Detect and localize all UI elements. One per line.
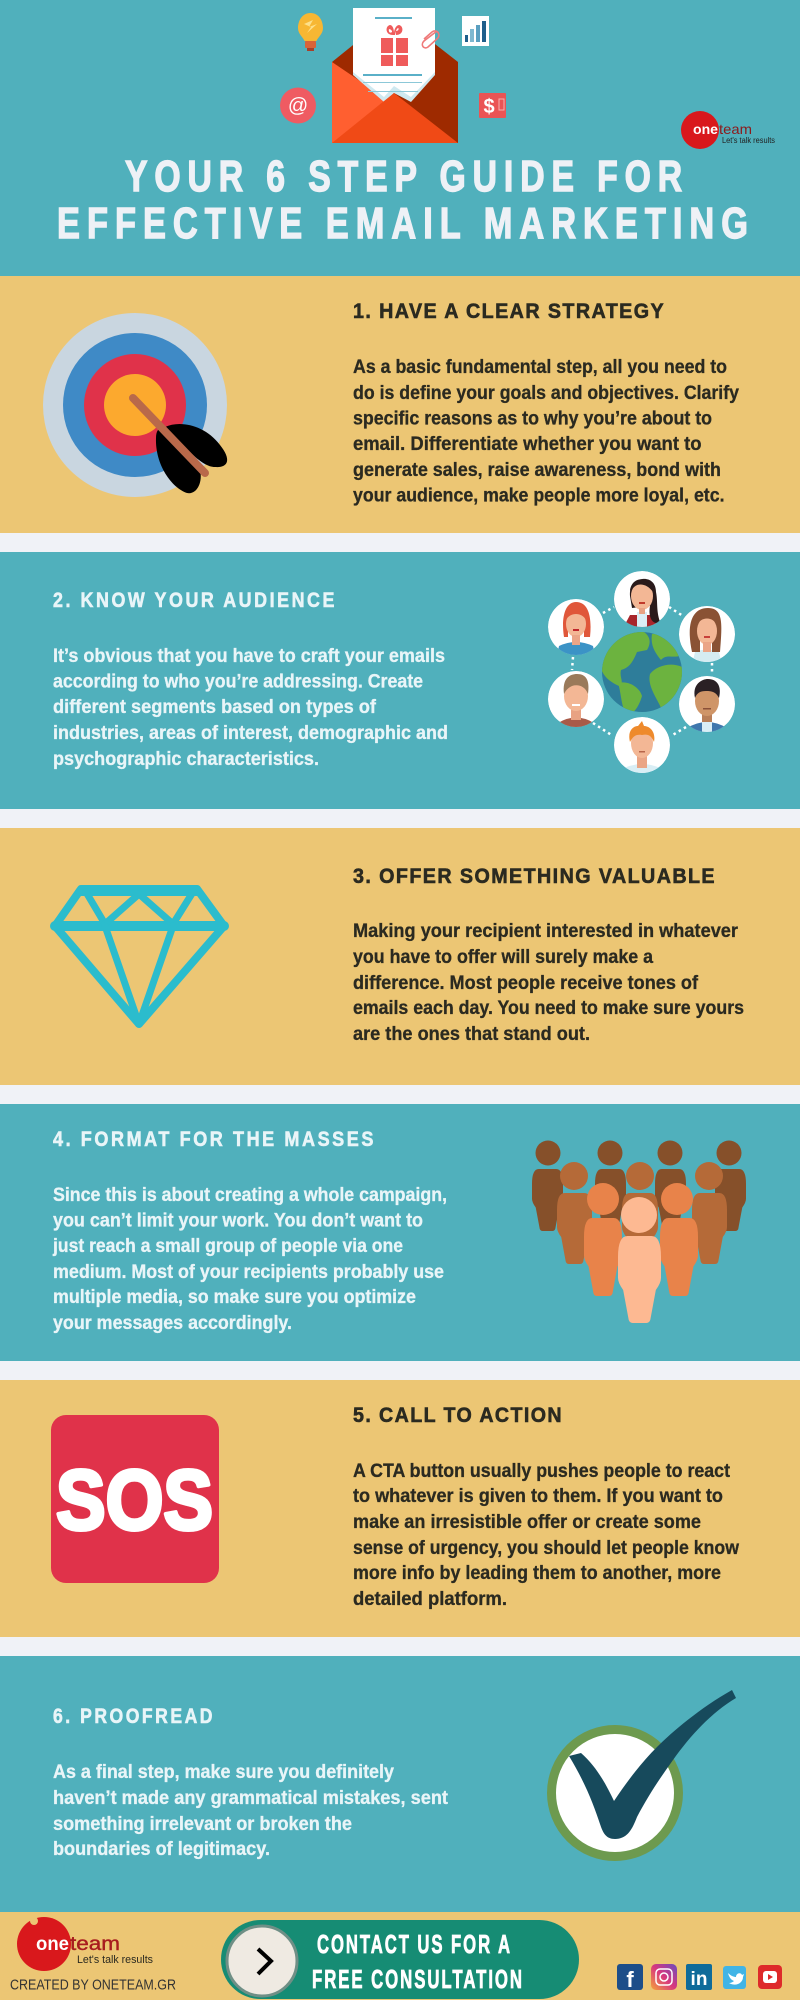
icon: dollar tile: $ [483, 96, 495, 118]
icon: woman dark hair [614, 571, 670, 630]
text: step 5 body: make an irresistible offer or create some [353, 1512, 701, 1533]
icon: gift [381, 25, 408, 66]
text: step 1 body: email. Differentiate whether you want to [353, 434, 702, 455]
icon: facebook: f [626, 1967, 634, 1992]
panel: footer [0, 1912, 800, 2000]
icon: youtube [758, 1965, 782, 1989]
text: step 6 body: something irrelevant or broken the [53, 1814, 352, 1835]
text: step 4 body: you can’t limit your work. You don’t want to [53, 1210, 423, 1232]
text: step 4 body: just reach a small group of people via one [52, 1236, 403, 1257]
text: step 4 body [52, 1185, 447, 1334]
icon: woman brown hair [679, 606, 735, 665]
icon: at sign [280, 88, 316, 124]
heading: step 4: 4. FORMAT FOR THE MASSES [53, 1128, 376, 1151]
text: step 1 body: do is define your goals and objectives. Clarify [353, 383, 739, 404]
heading: step 2: 2. KNOW YOUR AUDIENCE [53, 589, 337, 612]
text: step 1 body: your audience, make people more loyal, etc. [353, 486, 724, 506]
heading: step 1: 1. HAVE A CLEAR STRATEGY [353, 300, 665, 323]
text: step 4 body: medium. Most of your recipients probably use [53, 1262, 444, 1283]
icon: at sign: @ [288, 95, 308, 117]
text: step 6 body [53, 1762, 449, 1860]
text: step 2 body: industries, areas of interest, demographic and [53, 723, 448, 744]
text: step 4 body: your messages accordingly. [53, 1313, 292, 1334]
text: step 2 body: psychographic characteristics. [53, 749, 319, 770]
text: step 2 body [53, 646, 448, 770]
text: step 5 body: to whatever is given to them. If you want to [353, 1486, 723, 1507]
text: step 4 body: Since this is about creating a whole campaign, [53, 1185, 447, 1206]
logo: oneteam footer [17, 1917, 153, 1971]
logo: oneteam footer: Let's talk results [77, 1954, 153, 1966]
text: step 3 body: you have to offer will surely make a [353, 947, 653, 968]
panel: step 1 [0, 276, 800, 533]
text: step 3 body: are the ones that stand out. [353, 1024, 590, 1045]
icon: SOS badge [51, 1415, 219, 1583]
icon: woman red hair [548, 599, 604, 660]
logo: oneteam header: one [693, 121, 718, 137]
logo: oneteam footer: team [70, 1934, 120, 1955]
text: step 1 body: specific reasons as to why you’re about to [353, 408, 712, 430]
text: step 4 body: multiple media, so make sure you optimize [53, 1287, 416, 1308]
icon: people around the globe [548, 571, 735, 780]
icon: target with arrow [43, 313, 227, 497]
icon: globe [600, 630, 684, 714]
panel: step 5 [0, 1380, 800, 1637]
icon: chevron button [227, 1926, 297, 1996]
title [57, 152, 755, 248]
text: step 1 body [353, 357, 739, 506]
text: step 5 body: more info by leading them to another, more [353, 1563, 721, 1584]
icon: instagram [651, 1964, 677, 1990]
icon: man orange hair [614, 717, 670, 773]
logo: oneteam footer: one [36, 1934, 69, 1955]
icon: dollar tile [479, 93, 506, 118]
panel: step 4 [0, 1104, 800, 1361]
text: credit: CREATED BY ONETEAM.GR [10, 1976, 176, 1994]
text: step 6 body: haven’t made any grammatical mistakes, sent [53, 1788, 449, 1809]
icon: check mark in circle [552, 1690, 736, 1856]
icon: man dark hair [679, 676, 735, 732]
text: step 1 body: As a basic fundamental step, all you need to [353, 357, 727, 378]
text: step 5 body: A CTA button usually pushes people to react [353, 1461, 731, 1482]
icon: crowd of people [532, 1140, 746, 1323]
text: step 3 body: emails each day. You need to make sure yours [353, 998, 744, 1019]
panel: step 2 [0, 552, 800, 809]
heading: step 6: 6. PROOFREAD [53, 1705, 215, 1728]
panel: header [0, 0, 800, 276]
logo: oneteam header: team [719, 121, 752, 137]
icon: bar chart tile [462, 16, 489, 46]
text: step 3 body [353, 921, 744, 1045]
text: step 6 body: boundaries of legitimacy. [53, 1839, 270, 1860]
text: step 2 body: according to who you’re addressing. Create [53, 672, 423, 692]
text: button label: FREE CONSULTATION [312, 1964, 524, 1994]
text: step 2 body: It’s obvious that you have to craft your emails [53, 646, 445, 667]
text: step 5 body: detailed platform. [353, 1589, 507, 1610]
logo: oneteam header: Let's talk results [722, 136, 775, 145]
icon: paperclip [422, 31, 439, 48]
icon: facebook [617, 1964, 643, 1992]
icon: light bulb [298, 13, 323, 51]
icon: envelope with letter [332, 8, 458, 143]
logo: oneteam header [681, 111, 775, 149]
heading: step 5: 5. CALL TO ACTION [353, 1404, 563, 1427]
text: step 5 body [353, 1461, 739, 1610]
text: step 5 body: sense of urgency, you should let people know [353, 1538, 739, 1559]
icon: diamond [55, 889, 224, 1024]
panel: step 6 [0, 1656, 800, 1912]
heading: step 3: 3. OFFER SOMETHING VALUABLE [353, 865, 716, 888]
text: step 3 body: difference. Most people receive tones of [353, 973, 699, 994]
text: step 2 body: different segments based on types of [53, 697, 377, 718]
icon: man light brown hair [548, 671, 604, 727]
text: step 3 body: Making your recipient interested in whatever [353, 921, 739, 942]
panel: step 3 [0, 828, 800, 1085]
call to action button [221, 1920, 579, 1999]
text: button label: CONTACT US FOR A [317, 1929, 512, 1959]
text: step 6 body: As a final step, make sure you definitely [53, 1762, 394, 1783]
icon: linkedin: in [691, 1969, 707, 1990]
text: button label [312, 1929, 524, 1994]
text: step 1 body: generate sales, raise awareness, bond with [353, 460, 721, 481]
icon: linkedin [686, 1964, 712, 1990]
icon: SOS badge: SOS [56, 1453, 213, 1547]
icon: twitter [723, 1966, 746, 1989]
